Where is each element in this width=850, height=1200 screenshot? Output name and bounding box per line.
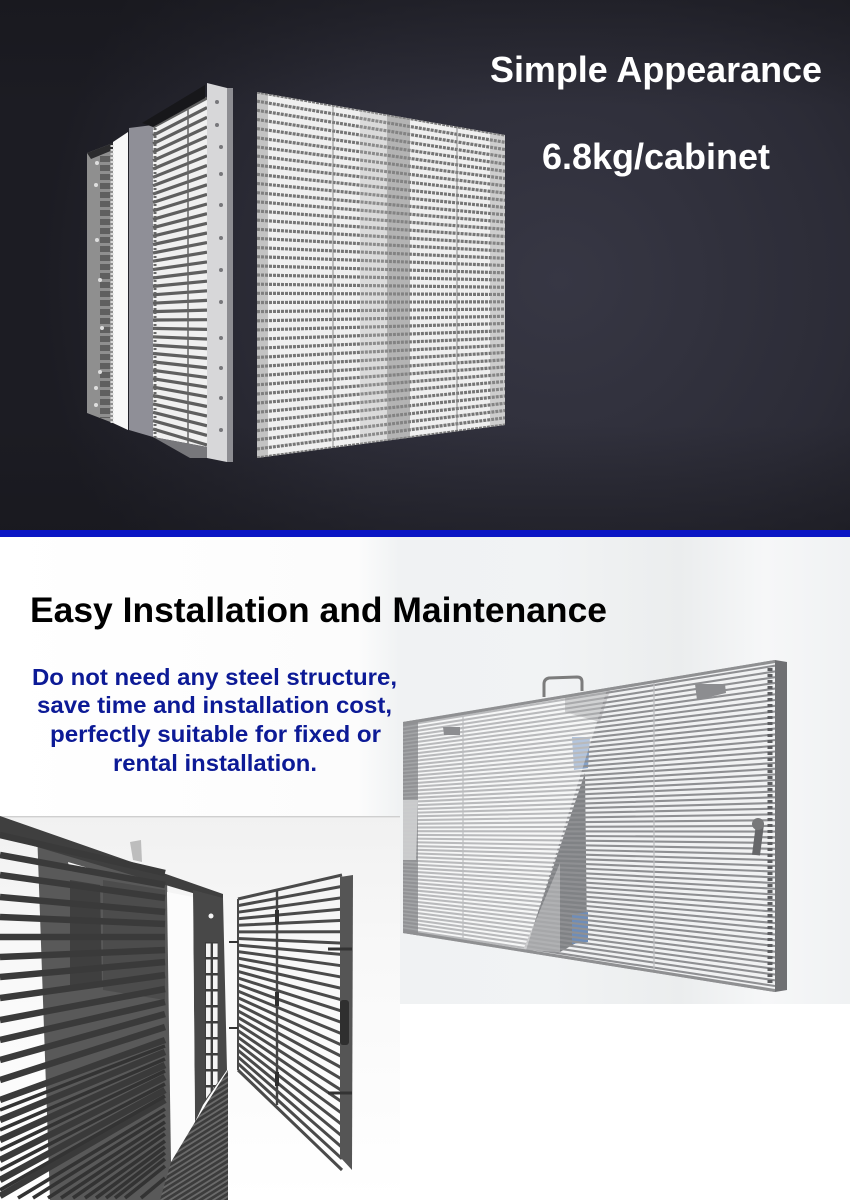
text block: installation description: save time and installation cost, (37, 692, 392, 718)
panel: dark background (0, 0, 850, 531)
text: weight per cabinet: 6.8kg/cabinet (542, 136, 770, 177)
image: cabinet rear, perspective view (87, 83, 233, 462)
image: exploded cabinet frame in grey (0, 816, 400, 1200)
text block: installation description (32, 664, 397, 776)
heading: simple appearance: Simple Appearance (490, 49, 822, 90)
text block: installation description: rental installation. (113, 750, 317, 776)
image: transparent screen cabinet with handle (403, 660, 787, 992)
text block: installation description: Do not need any steel structure, (32, 664, 397, 690)
image: detached grey module with slats (229, 875, 353, 1170)
heading: easy installation and maintenance: Easy Installation and Maintenance (30, 590, 607, 630)
image: cabinet front panel (257, 90, 505, 460)
text block: installation description: perfectly suitable for fixed or (50, 721, 381, 747)
panel: light room background (0, 537, 850, 1004)
divider: blue band (0, 530, 850, 537)
